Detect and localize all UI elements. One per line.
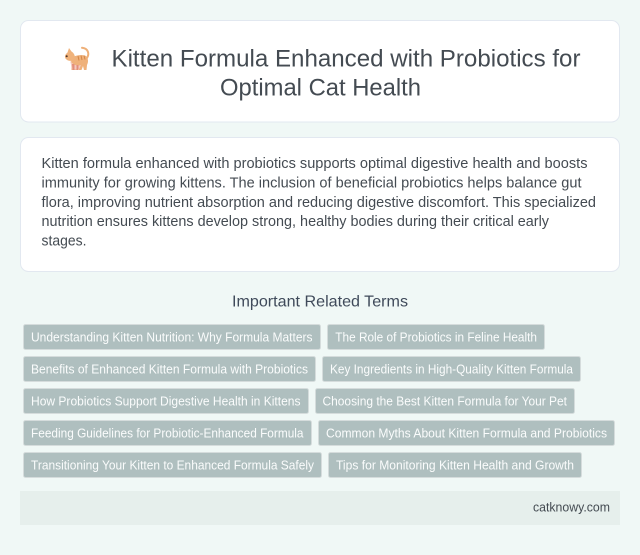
panel: title card (20, 20, 620, 122)
tag: key ingredients (322, 356, 580, 382)
tag: transitioning safely: Transitioning Your Kitten to Enhanced Formula Safely (31, 458, 315, 472)
heading: important related terms: Important Related Terms (232, 294, 408, 310)
tag: benefits of enhanced formula (24, 356, 316, 382)
title text: Kitten Formula Enhanced with Probiotics for (112, 46, 580, 72)
description text: nutrition ensures kittens develop strong, healthy bodies during their critical early (42, 214, 550, 230)
tag: role of probiotics: The Role of Probiotics in Feline Health (335, 330, 537, 344)
tag: common myths: Common Myths About Kitten Formula and Probiotics (326, 426, 607, 440)
tag: monitoring tips (328, 452, 582, 478)
tag: choosing the best formula: Choosing the Best Kitten Formula for Your Pet (322, 394, 568, 408)
title text: Optimal Cat Health (220, 74, 421, 102)
tag: digestive health (24, 388, 308, 414)
tag list (24, 324, 614, 478)
title text (112, 46, 580, 102)
tag: digestive health: How Probiotics Support Digestive Health in Kittens (31, 394, 300, 408)
tag: key ingredients: Key Ingredients in High-Quality Kitten Formula (330, 362, 573, 376)
tag: feeding guidelines (24, 420, 312, 446)
description text: stages. (42, 234, 86, 250)
footer text: site name: catknowy.com (533, 500, 610, 515)
description text: immunity for growing kittens. The inclusion of beneficial probiotics helps balance gut (42, 176, 582, 192)
tag: benefits of enhanced formula: Benefits of Enhanced Kitten Formula with Probiotics (31, 362, 308, 376)
tag: common myths (318, 420, 614, 446)
tag: role of probiotics (328, 324, 544, 350)
tag: monitoring tips: Tips for Monitoring Kitten Health and Growth (336, 458, 574, 472)
tag: understanding kitten nutrition: Understanding Kitten Nutrition: Why Formula Matters (31, 330, 312, 344)
description text: Kitten formula enhanced with probiotics supports optimal digestive health and boosts (42, 156, 588, 172)
tag: choosing the best formula (316, 388, 574, 414)
tag: transitioning safely (24, 452, 322, 478)
tag: understanding kitten nutrition (24, 324, 320, 350)
icon: kitten (65, 48, 88, 70)
panel: description card (20, 138, 620, 272)
tag: feeding guidelines: Feeding Guidelines for Probiotic-Enhanced Formula (31, 426, 304, 440)
footer bar (20, 491, 620, 525)
description text: flora, improving nutrient absorption and reducing digestive discomfort. This specialized (42, 195, 596, 211)
description text (42, 156, 596, 250)
